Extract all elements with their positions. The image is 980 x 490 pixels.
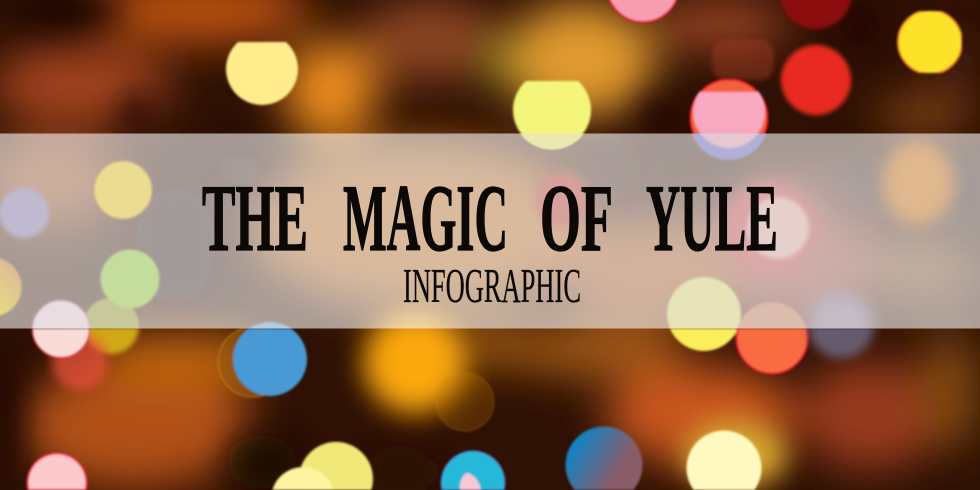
glow around white light [683, 421, 787, 489]
light: faint red square [712, 40, 774, 80]
light: pale yellow [226, 33, 298, 105]
light: orange crescent [217, 328, 266, 399]
disc: left yellow [0, 258, 22, 316]
muted grey in the band [135, 145, 980, 305]
disc: yellow green continuation [520, 134, 584, 150]
light: lavender lower [802, 328, 880, 364]
light: dark red top [780, 0, 852, 29]
light: red [781, 45, 851, 115]
light: glowing white [686, 431, 762, 490]
light: yellow bottom [299, 442, 373, 490]
light: yellow right [898, 10, 962, 74]
disc: pale coral [738, 302, 807, 328]
disc: blue lavender [691, 134, 767, 161]
subtitle: INFOGRAPHIC [403, 258, 581, 313]
light: yellow green [513, 71, 591, 149]
word: OF: OF [540, 165, 613, 271]
light: blue gradient [566, 427, 642, 490]
disc: white behind YULE [747, 197, 809, 259]
ring: faint amber [436, 373, 494, 431]
disc: olive [85, 298, 140, 328]
light: pink top [607, 0, 679, 22]
light: teal [441, 451, 505, 490]
disc: pink behind OF [535, 173, 589, 227]
light: pink patch in teal [460, 473, 481, 490]
translucent title band [0, 134, 980, 328]
word: YULE: YULE [646, 165, 778, 271]
disc: lavender lower [804, 288, 880, 328]
disc: pale blue [248, 320, 292, 328]
light: pale pink [30, 328, 92, 360]
light: pale yellow lower [669, 328, 738, 353]
lights seen through the band [0, 134, 962, 328]
title [202, 165, 778, 271]
word: THE: THE [202, 165, 308, 271]
light: yellow under band [87, 328, 142, 358]
light: pale yellow bottom [272, 467, 334, 490]
disc: white pink [31, 299, 91, 328]
disc: pale yellow [666, 276, 742, 328]
light: pink centre [691, 90, 767, 134]
disc: lavender left [0, 188, 49, 238]
title: MAGIC [343, 165, 508, 271]
light: pink on red [688, 77, 770, 140]
orange glow lower centre [363, 310, 467, 414]
glow: tan disc right [882, 141, 954, 225]
disc: pale green [100, 250, 160, 308]
glow: pink behind YULE [722, 180, 814, 276]
light: coral [734, 328, 810, 376]
light: blue [233, 322, 307, 396]
disc: pink continuation [699, 134, 759, 149]
disc: cream [94, 161, 152, 219]
light: pink bottom left [27, 453, 86, 490]
light: red glow [52, 334, 108, 390]
